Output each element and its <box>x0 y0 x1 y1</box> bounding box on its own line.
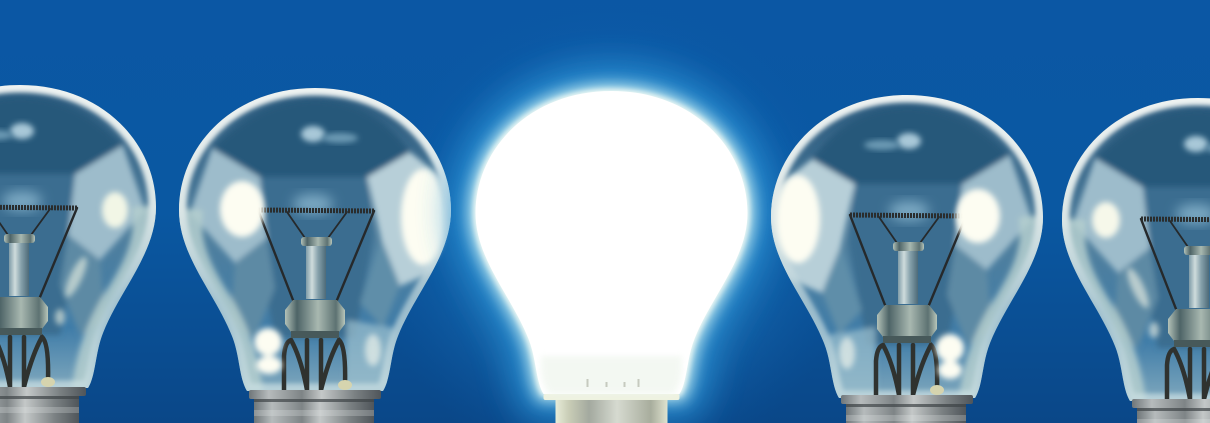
bulb 1: clear bulb cropped at left <box>0 85 160 423</box>
reflection highlights <box>220 169 445 374</box>
bulb 3: lit glowing bulb <box>476 91 748 423</box>
reflection highlights <box>776 175 1000 379</box>
reflection highlights <box>55 192 128 325</box>
bulb 5: clear bulb cropped at right <box>1058 98 1210 423</box>
faint filament marks <box>586 379 640 387</box>
reflection highlights <box>1092 202 1159 338</box>
glow: halo around lit bulb <box>476 91 748 394</box>
bulb 4: clear bulb <box>767 95 1047 423</box>
bulb 2: clear bulb <box>175 88 455 423</box>
